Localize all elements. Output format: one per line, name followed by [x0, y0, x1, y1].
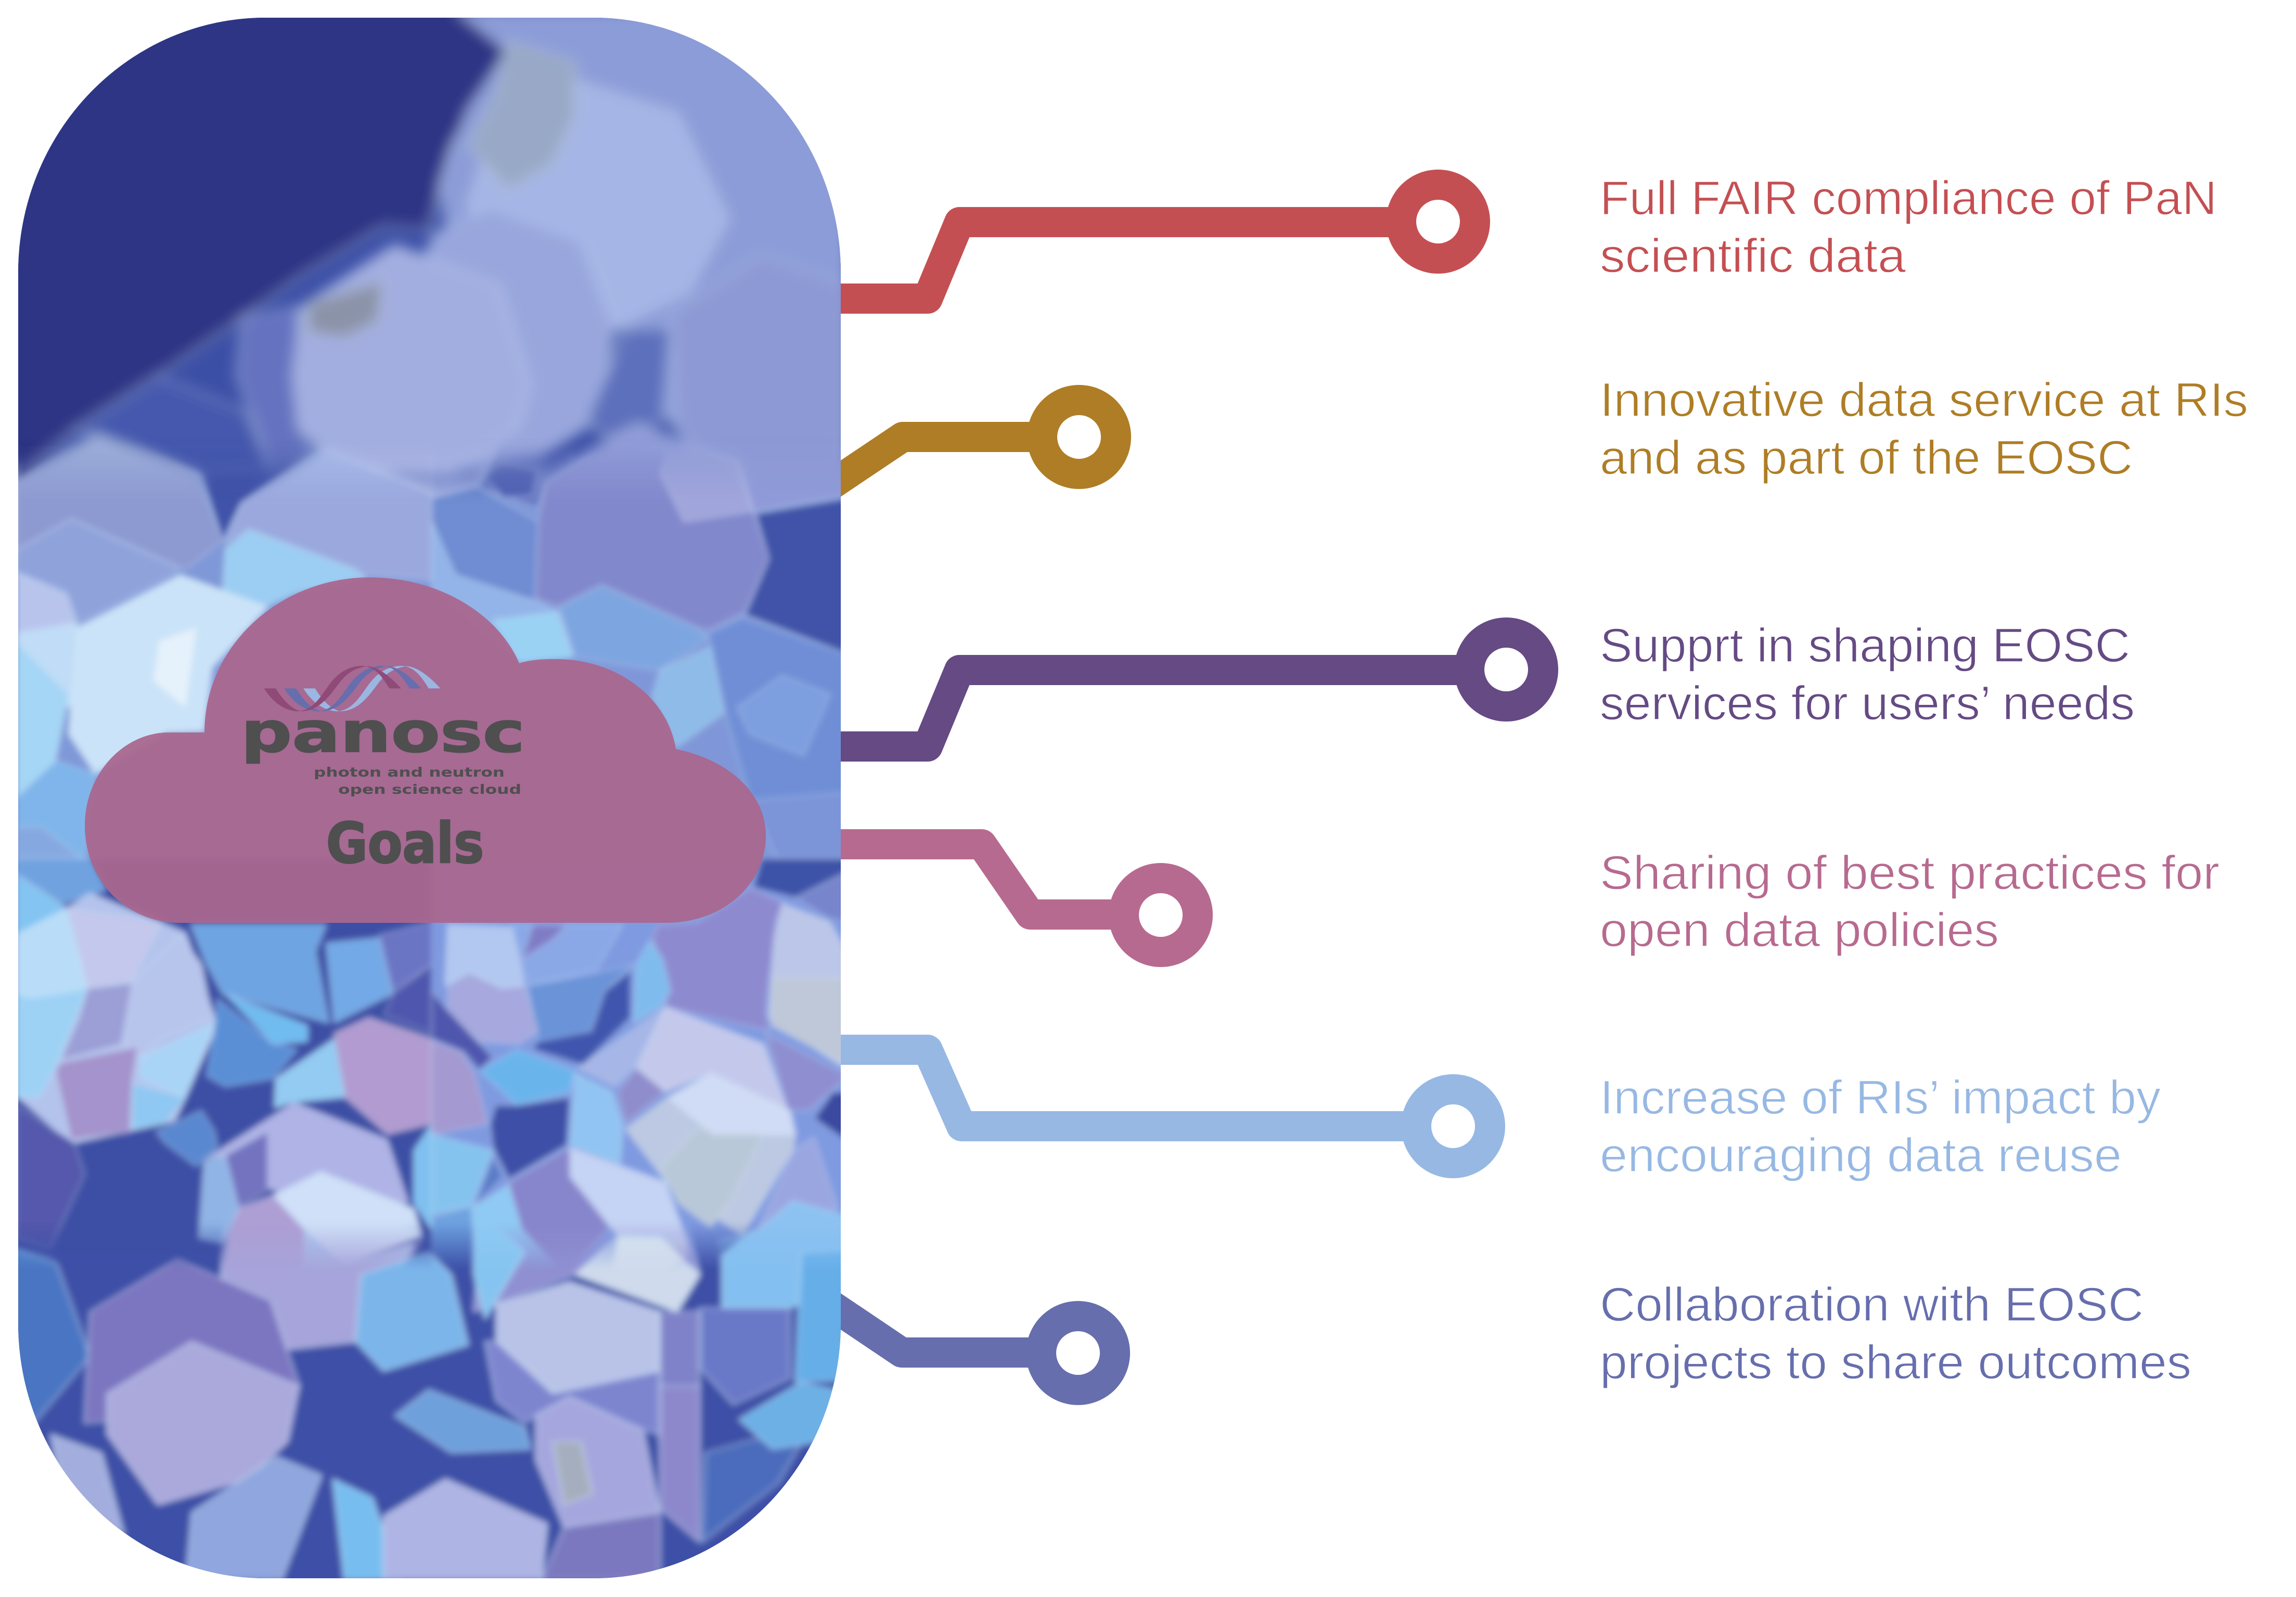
- icon: helix ribbons: [264, 666, 440, 711]
- logo: panosc: [241, 666, 525, 797]
- text: goal 3: [1600, 619, 2135, 730]
- text: goal 6: [1600, 1278, 2191, 1389]
- connector: indigo: [825, 1301, 1130, 1405]
- text: goal 6: projects to share outcomes: [1600, 1336, 2191, 1389]
- logo wordmark: panosc: [241, 701, 525, 765]
- text: goal 5: [1600, 1071, 2161, 1182]
- connector: purple: [825, 617, 1558, 746]
- text: goal 4: Sharing of best practices for: [1600, 846, 2220, 899]
- connector: light blue: [825, 1050, 1505, 1178]
- logo tagline line 2: open science cloud: [338, 782, 521, 797]
- text: goal 4: open data policies: [1600, 904, 1999, 957]
- connector: red: [825, 170, 1490, 299]
- text: goal 2: and as part of the EOSC: [1600, 431, 2133, 484]
- text: goal 1: Full FAIR compliance of PaN: [1600, 172, 2217, 225]
- text: goal 6: Collaboration with EOSC: [1600, 1278, 2144, 1331]
- connector: pink: [825, 844, 1213, 967]
- text: goal 2: [1600, 374, 2248, 484]
- text: goal 1: scientific data: [1600, 229, 1906, 282]
- text: goal 1: [1600, 172, 2217, 282]
- panel: bokeh photo pill: [18, 18, 841, 1578]
- crop grid: upper left: [16, 442, 432, 858]
- crop grid: upper right: [432, 442, 848, 858]
- text: goal 5: Increase of RIs’ impact by: [1600, 1071, 2161, 1124]
- text: goal 3: Supprt in shaping EOSC: [1600, 619, 2130, 672]
- text: goal 4: [1600, 846, 2220, 957]
- crop grid: bottom band: [0, 1014, 903, 1597]
- text: goal 2: Innovative data service at RIs: [1600, 374, 2248, 427]
- text: goal 5: encouraging data reuse: [1600, 1129, 2122, 1182]
- crop grid: lower right: [432, 858, 848, 1274]
- connector: gold: [825, 385, 1131, 489]
- text: goal 3: services for users’ needs: [1600, 677, 2135, 730]
- logo tagline line 1: photon and neutron: [314, 765, 505, 780]
- crop grid: lower left: [16, 858, 432, 1274]
- cloud: [85, 577, 766, 923]
- heading: Goals: Goals: [326, 812, 484, 876]
